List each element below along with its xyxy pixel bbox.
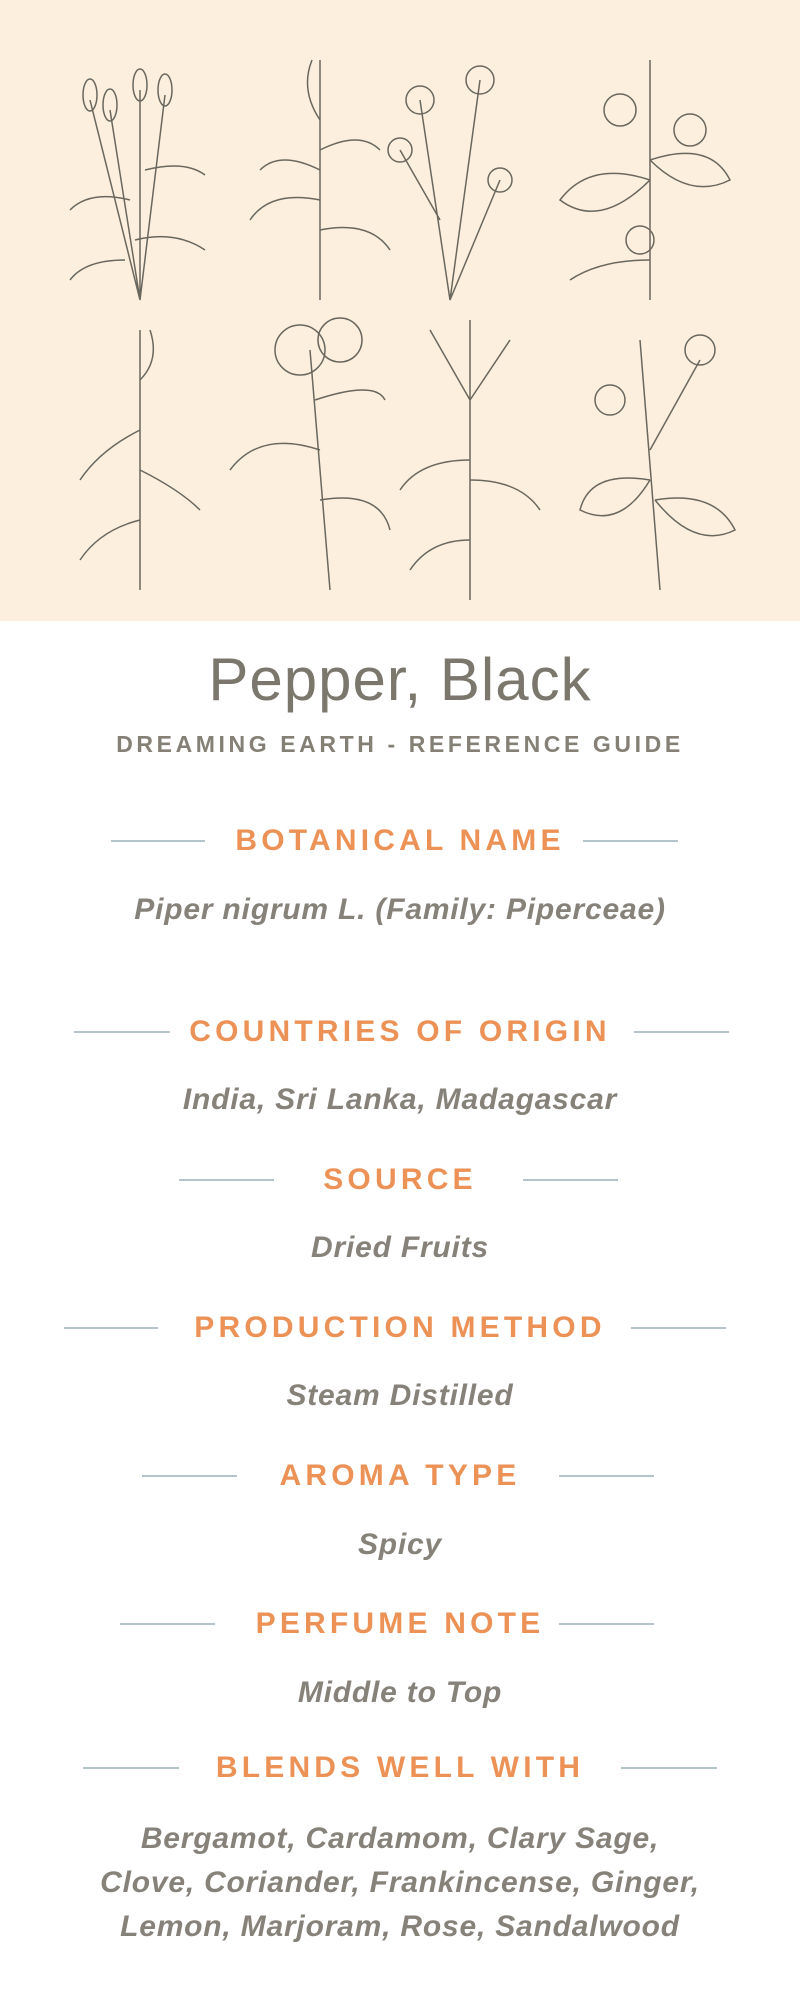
- heading: botanical name: BOTANICAL NAME: [235, 824, 565, 857]
- heading: perfume note: PERFUME NOTE: [256, 1607, 544, 1640]
- title: Pepper, Black: [208, 646, 592, 713]
- header: botanical illustrations: [0, 0, 800, 621]
- plant 5: [80, 330, 200, 590]
- subtitle: DREAMING EARTH - REFERENCE GUIDE: [116, 731, 684, 757]
- heading: aroma type: AROMA TYPE: [280, 1459, 520, 1492]
- text: blends: Bergamot, Cardamom, Clary Sage,: [141, 1822, 659, 1855]
- text: perfume note: Middle to Top: [298, 1676, 502, 1709]
- text: source: Dried Fruits: [311, 1231, 489, 1264]
- heading: source: SOURCE: [323, 1163, 477, 1196]
- text: botanical name: Piper nigrum L. (Family: Piperceae): [134, 893, 666, 926]
- heading: production method: PRODUCTION METHOD: [194, 1311, 606, 1344]
- text: production method: Steam Distilled: [286, 1379, 514, 1412]
- text: blends: Lemon, Marjoram, Rose, Sandalwood: [120, 1910, 680, 1943]
- plant 1: [70, 69, 205, 300]
- plant 2: [250, 60, 390, 300]
- heading: blends well with: BLENDS WELL WITH: [216, 1751, 584, 1784]
- text: blends: Clove, Coriander, Frankincense, Ginger,: [100, 1866, 700, 1899]
- text: blends: [100, 1822, 700, 1943]
- text: aroma type: Spicy: [358, 1528, 442, 1561]
- plant 6: [230, 318, 390, 590]
- plant 7: [400, 320, 540, 600]
- plant 8: [580, 335, 735, 590]
- text: countries: India, Sri Lanka, Madagascar: [183, 1083, 617, 1116]
- heading: countries: COUNTRIES OF ORIGIN: [189, 1015, 611, 1048]
- plant 4: [560, 60, 730, 300]
- plant 3: [388, 66, 512, 300]
